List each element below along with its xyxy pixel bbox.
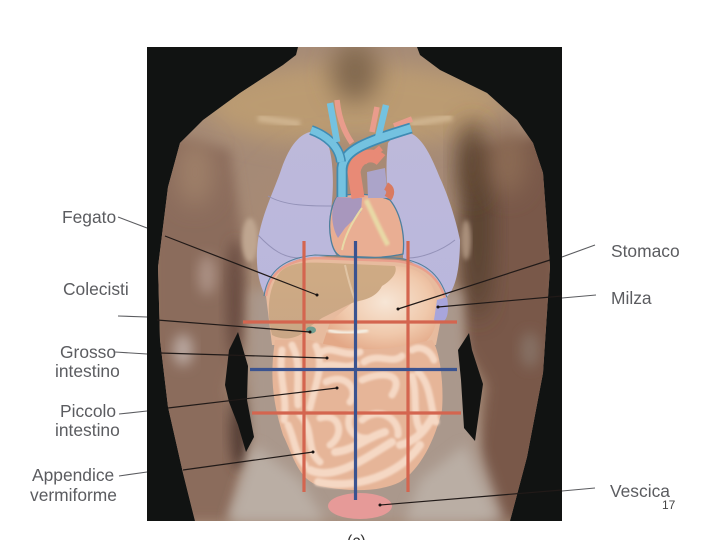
shoulders and chest tones <box>205 63 505 147</box>
right arm shading <box>462 130 560 521</box>
stomach <box>322 266 437 352</box>
diaphragm edge <box>266 258 445 345</box>
gallbladder <box>306 326 316 334</box>
black photo background <box>147 47 562 521</box>
label: Piccolo intestino: Piccolo <box>60 401 116 421</box>
label: Piccolo intestino: intestino <box>55 420 120 440</box>
leader end dots <box>308 294 440 506</box>
label: Milza: Milza <box>611 288 652 308</box>
slide number: 17 <box>662 498 676 512</box>
lungs <box>257 132 460 298</box>
spleen <box>434 297 448 322</box>
label: Grosso intestino: intestino <box>55 361 120 381</box>
leader lines inside the photo <box>157 236 562 505</box>
liver <box>269 263 396 339</box>
rib patches beside the lungs <box>242 218 258 262</box>
body silhouette <box>147 42 562 521</box>
label: Vescica: Vescica <box>610 481 670 501</box>
leader lines outside the photo <box>115 217 596 491</box>
belly and hips <box>228 290 505 521</box>
abdominal grid: red and blue lines <box>243 241 461 500</box>
left arm shading <box>158 137 245 521</box>
label: Stomaco: Stomaco <box>611 241 680 261</box>
collar bones <box>258 117 452 124</box>
label: Appendice vermiforme: vermiforme <box>30 485 117 505</box>
photo panel: male torso with organs <box>147 42 562 521</box>
heart and great vessels <box>311 100 412 258</box>
label: Grosso intestino: Grosso <box>60 342 116 362</box>
label: Appendice vermiforme: Appendice <box>32 465 114 485</box>
intestines <box>272 340 443 490</box>
bladder <box>328 493 392 519</box>
label: Colecisti: Colecisti <box>63 279 129 299</box>
black gaps between arms and torso <box>225 332 483 452</box>
label: Fegato: Fegato <box>62 207 116 227</box>
